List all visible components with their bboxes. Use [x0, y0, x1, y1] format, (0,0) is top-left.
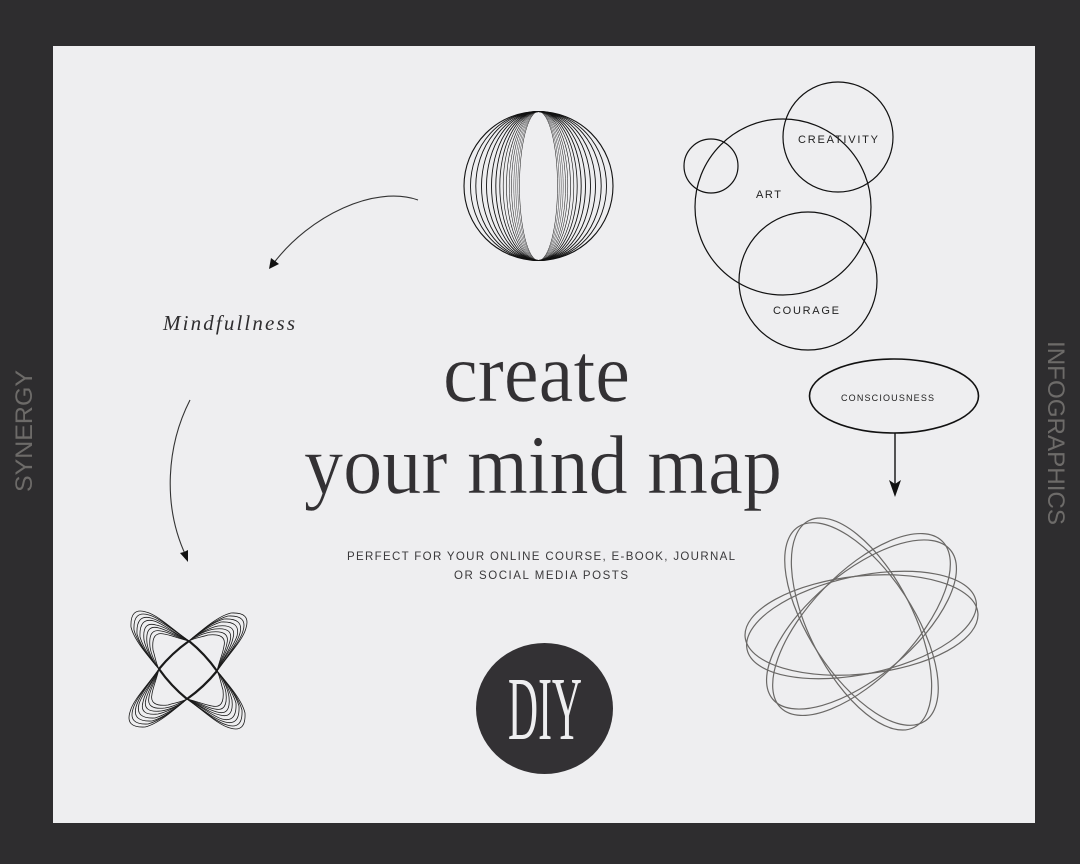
arrow: mindfullness to x icon [170, 400, 190, 562]
arrow: consciousness to orbits [889, 433, 901, 497]
subtitle: OR SOCIAL MEDIA POSTS [454, 570, 628, 582]
icon: four-lobed line x [129, 611, 247, 729]
subtitle: PERFECT FOR YOUR ONLINE COURSE, E-BOOK, JOURNAL [347, 551, 736, 563]
node: consciousness [810, 359, 978, 433]
side label: infographics: INFOGRAPHICS [1042, 341, 1069, 525]
node: consciousness: CONSCIOUSNESS [841, 393, 934, 403]
venn diagram: ART [756, 189, 781, 201]
title: create: create [443, 327, 630, 420]
icon: line sphere [464, 112, 613, 260]
venn diagram: CREATIVITY [798, 134, 879, 146]
subtitle [347, 551, 736, 582]
label: mindfullness: Mindfullness [162, 311, 295, 335]
side label: synergy: SYNERGY [11, 370, 38, 492]
badge: diy: DIY [508, 660, 582, 759]
icon: orbit rings [737, 497, 986, 751]
arrow: sphere to mindfullness [269, 196, 418, 269]
badge: diy [476, 643, 613, 774]
venn diagram [684, 82, 893, 350]
title: your mind map: your mind map [304, 419, 782, 512]
venn diagram: COURAGE [773, 305, 839, 317]
